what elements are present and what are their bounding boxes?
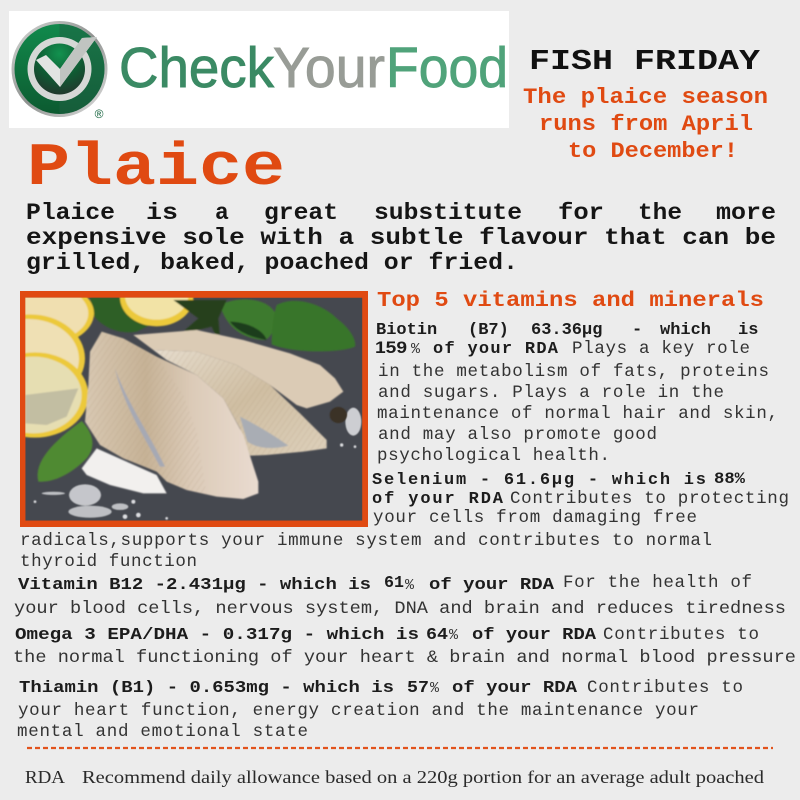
front fillet (85, 332, 258, 499)
nutrient: selenium: Contributes to protecting (510, 489, 789, 509)
nutrient: thiamin: Thiamin (B1) - 0.653mg - which is (19, 679, 394, 698)
nutrient: selenium: of your RDA (372, 490, 504, 509)
nutrient: biotin: which (660, 321, 711, 340)
nutrient: omega 3: Omega 3 EPA/DHA - 0.317g - which is (15, 626, 419, 645)
nutrient: omega 3: Contributes to (603, 625, 759, 645)
logo wordmark: Your (273, 36, 385, 100)
logo wordmark: Food (386, 36, 508, 100)
heading: top 5 vitamins and minerals: Top 5 vitamins and minerals (377, 289, 764, 313)
nutrient: thiamin: your heart function, energy creation and the maintenance your (18, 701, 699, 721)
nutrient: thiamin: % (430, 680, 440, 697)
intro paragraph (26, 200, 776, 276)
intro paragraph: Plaice (26, 200, 115, 226)
footnote: RDA definition: RDA (25, 767, 65, 787)
herbs and lemons (25, 298, 356, 482)
nutrient: vitamin B12: your blood cells, nervous system, DNA and brain and reduces tiredness (14, 599, 786, 619)
nutrient: omega 3: of your RDA (472, 626, 597, 645)
intro paragraph: substitute (374, 200, 522, 226)
intro paragraph: is (146, 200, 178, 226)
nutrient: biotin: Biotin (376, 321, 437, 340)
nutrient: biotin: of your RDA (433, 340, 559, 359)
nutrient: thiamin (17, 678, 743, 742)
nutrient: thiamin: mental and emotional state (17, 722, 308, 742)
nutrient: thiamin: of your RDA (452, 679, 578, 698)
nutrient: selenium: your cells from damaging free (373, 508, 697, 528)
logo: CheckYourFood (9, 11, 509, 128)
white skin (82, 448, 167, 493)
nutrient: biotin: maintenance of normal hair and skin, (377, 404, 778, 424)
nutrient: biotin: (B7) (468, 321, 509, 340)
intro paragraph: a (215, 200, 229, 226)
nutrient: omega 3: 64 (426, 626, 448, 645)
nutrient: omega 3: % (449, 627, 459, 644)
heading: Fish Friday: FISH FRIDAY (529, 45, 761, 78)
nutrient: selenium: 88% (714, 470, 745, 488)
logo wordmark: Check (119, 36, 274, 100)
nutrient: biotin (375, 321, 778, 466)
middle fillet (153, 350, 327, 456)
nutrient: vitamin B12 (14, 573, 786, 619)
season note (523, 85, 768, 164)
nutrient: vitamin B12: For the health of (563, 573, 752, 593)
intro paragraph: more (716, 200, 776, 226)
nutrient: biotin: in the metabolism of fats, proteins (378, 362, 769, 382)
nutrient: biotin: 63.36µg (531, 321, 602, 340)
intro paragraph: grilled, baked, poached or fried. (26, 250, 518, 276)
nutrient: vitamin B12: of your RDA (429, 576, 555, 595)
nutrient: thiamin: 57 (407, 679, 429, 698)
intro paragraph: expensive sole with a subtle flavour that can be (26, 225, 776, 251)
title: Plaice: Plaice (27, 135, 285, 203)
nutrient: thiamin: Contributes to (587, 678, 743, 698)
nutrient: selenium: Selenium - 61.6µg - which is (372, 471, 706, 490)
nutrient: omega 3 (13, 625, 796, 668)
season note: runs from April (539, 112, 753, 137)
nutrient: biotin: 159 (375, 338, 407, 357)
intro paragraph: great (264, 200, 338, 226)
nutrient: biotin: and sugars. Plays a role in the (378, 383, 724, 403)
icon: check mark roundel: ® (95, 107, 104, 121)
back fillet (133, 330, 343, 408)
nutrient: selenium: thyroid function (20, 552, 197, 572)
nutrient: selenium (20, 470, 789, 572)
nutrient: omega 3: the normal functioning of your heart & brain and normal blood pressure (13, 648, 796, 668)
nutrient: biotin: - (632, 321, 642, 340)
nutrient: vitamin B12: 61 (384, 574, 404, 593)
footnote: RDA definition: Recommend daily allowance based on a 220g portion for an average adult poached (82, 767, 764, 787)
intro paragraph: for (558, 200, 604, 226)
icon: check mark roundel (12, 21, 108, 121)
salt and peppercorns (34, 408, 361, 520)
nutrient: biotin: psychological health. (377, 446, 610, 466)
nutrient: biotin: is (738, 321, 758, 340)
nutrient: selenium: radicals,supports your immune system and contributes to normal (20, 531, 712, 551)
nutrient: biotin: % (411, 341, 421, 358)
intro paragraph: the (638, 200, 682, 226)
nutrient: biotin: and may also promote good (378, 425, 657, 445)
season note: to December! (568, 139, 738, 164)
season note: The plaice season (523, 85, 768, 110)
photo: plaice fillets (20, 291, 368, 527)
nutrient: vitamin B12: % (405, 577, 415, 594)
nutrient: vitamin B12: Vitamin B12 -2.431µg - which is (18, 576, 371, 595)
nutrient: biotin: Plays a key role (572, 339, 750, 359)
